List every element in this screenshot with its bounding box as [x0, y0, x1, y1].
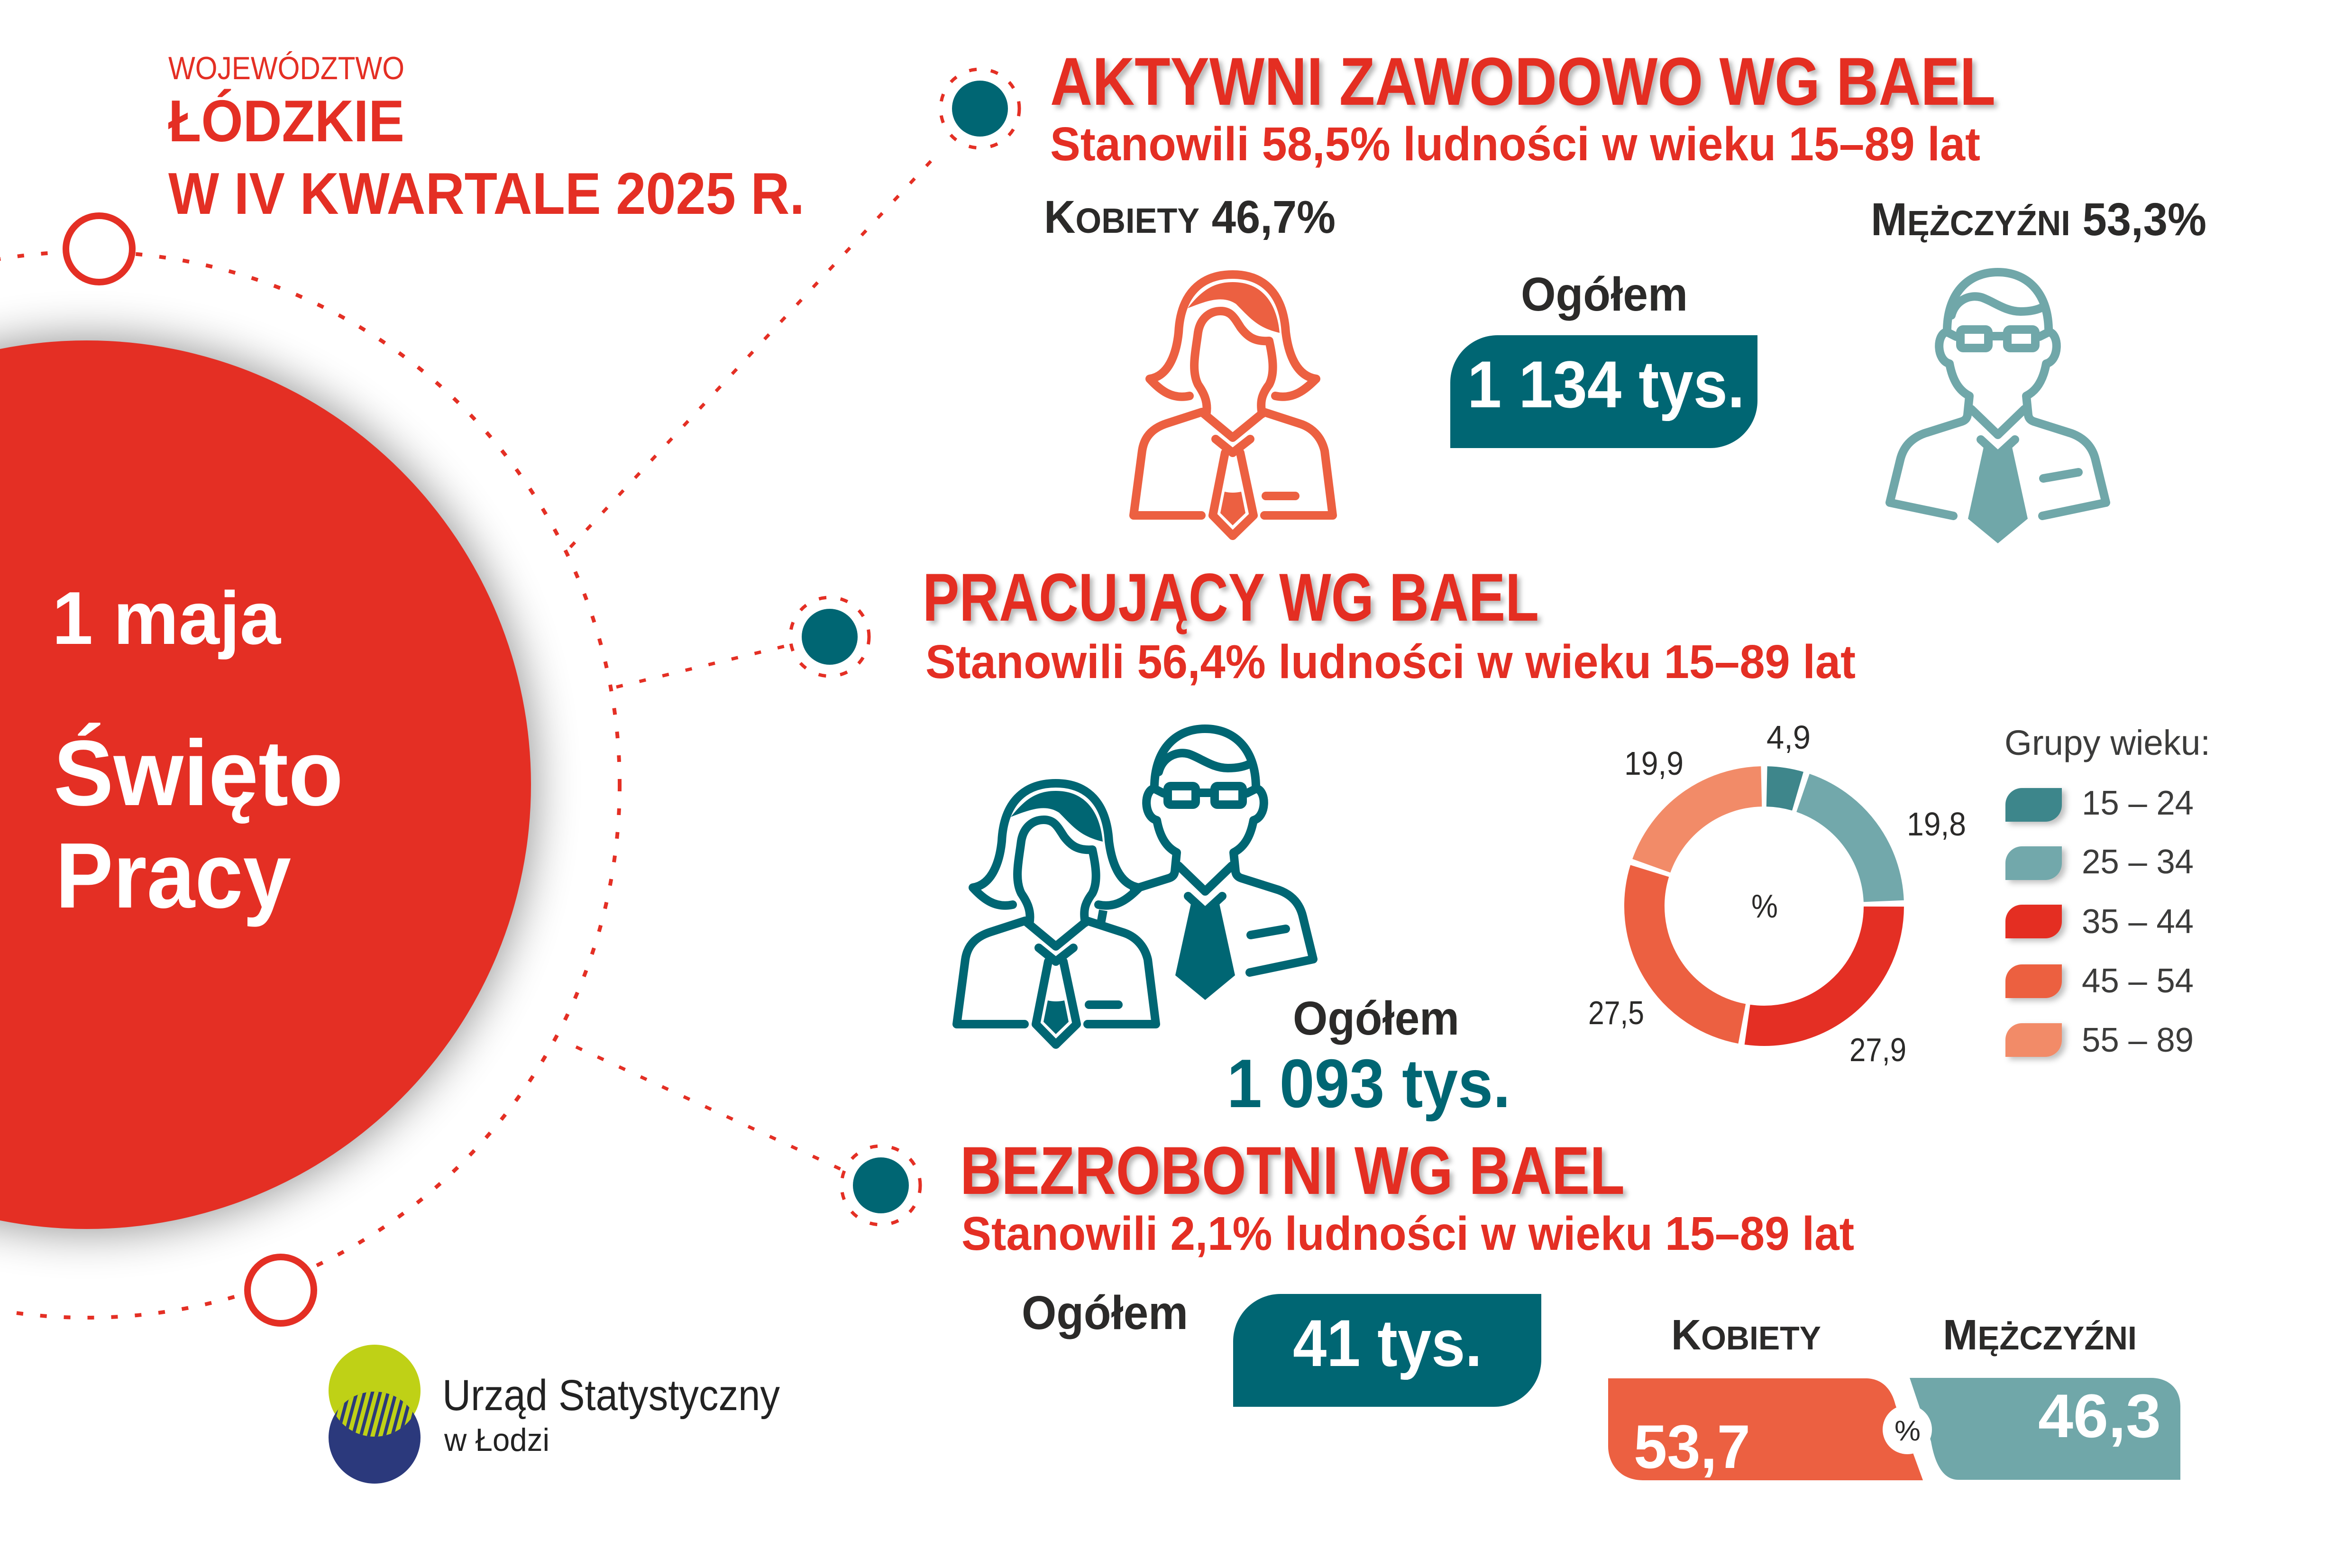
connector 3 [576, 1047, 843, 1170]
subheading: aktywni: Stanowili 58,5% ludności w wieku 15–89 lat [1050, 118, 1980, 171]
total label: aktywni: Ogółem [1521, 268, 1688, 321]
legend item 45-54: 45 – 54 [2082, 962, 2194, 1000]
big red circle with shadow [0, 338, 534, 1232]
woman figure [957, 783, 1156, 1045]
donut labels: 19,8 [1907, 806, 1966, 843]
icon: woman [1134, 275, 1333, 536]
segment 15-24 [1767, 787, 1798, 791]
connector 2 [616, 645, 790, 687]
total label: bezrobotni: Ogółem [1022, 1286, 1188, 1339]
total box: bezrobotni: 41 tys. [1293, 1306, 1482, 1380]
region name: ŁÓDZKIE [168, 89, 404, 154]
value women: 53,7 [1634, 1412, 1750, 1481]
percent badge [1883, 1405, 1932, 1454]
legend item 35-44: 35 – 44 [2082, 903, 2194, 941]
donut labels: 19,9 [1624, 745, 1684, 782]
label: mężczyźni: MĘŻCZYŹNI 53,3% [1871, 193, 2206, 245]
legend item 25-34: 25 – 34 [2082, 843, 2194, 881]
legend item 15-24: 15 – 24 [2082, 784, 2194, 822]
percent badge: % [1894, 1415, 1921, 1447]
donut labels: % [1751, 888, 1778, 925]
legend item 55-89 [2005, 1021, 2194, 1059]
label: kobiety bezrobotni: KOBIETY [1671, 1311, 1821, 1359]
man figure [1100, 729, 1313, 1000]
legend item 45-54 [2005, 962, 2194, 1000]
segment 25-34 [1803, 793, 1884, 901]
gender bar: bezrobotni [1608, 1378, 2180, 1481]
donut labels [1588, 719, 1966, 1068]
bar women [1608, 1378, 1923, 1480]
label: mężczyźni bezrobotni: MĘŻCZYŹNI [1943, 1311, 2137, 1359]
icon: man [1890, 272, 2106, 543]
value men: 46,3 [2038, 1381, 2161, 1450]
legend title: Grupy wieku: [2004, 723, 2210, 762]
legend item 55-89: 55 – 89 [2082, 1021, 2194, 1059]
legend [2004, 723, 2210, 1059]
legend item 25-34 [2005, 843, 2194, 881]
logo text line 1: Urząd Statystyczny [442, 1371, 780, 1420]
node 1 [941, 69, 1019, 148]
logo: Urząd Statystyczny w Łodzi [310, 1345, 780, 1484]
total box: bezrobotni [1233, 1294, 1541, 1407]
total value: pracujący: 1 093 tys. [1227, 1045, 1510, 1122]
section heading: aktywni zawodowo: AKTYWNI ZAWODOWO WG BAEL [1050, 44, 1995, 119]
section heading: bezrobotni: BEZROBOTNI WG BAEL [960, 1133, 1625, 1209]
dotted orbit around circle [0, 252, 620, 1318]
donut chart [1644, 787, 1884, 1026]
icon: man and woman [957, 729, 1313, 1045]
logo mark [329, 1345, 421, 1484]
subheading: bezrobotni: Stanowili 2,1% ludności w wieku 15–89 lat [961, 1207, 1854, 1260]
legend item 35-44 [2005, 903, 2194, 941]
donut labels: 27,9 [1849, 1031, 1906, 1068]
segment 45-54 [1644, 871, 1742, 1024]
node 2 [790, 597, 869, 676]
voivodeship label: WOJEWÓDZTWO [168, 50, 404, 86]
date: 1 maja [52, 577, 281, 660]
subheading: pracujący: Stanowili 56,4% ludności w wieku 15–89 lat [925, 635, 1856, 688]
segment 55-89 [1651, 787, 1761, 866]
holiday name line 2: Pracy [55, 824, 291, 927]
donut labels: 4,9 [1766, 719, 1811, 756]
total box: aktywni: 1 134 tys. [1467, 347, 1745, 422]
node 3 [842, 1146, 920, 1225]
orbit ring bottom [247, 1257, 314, 1323]
orbit ring top [66, 216, 132, 282]
segment 35-44 [1748, 907, 1884, 1026]
label: kobiety: KOBIETY 46,7% [1044, 191, 1336, 243]
holiday name line 1: Święto [54, 721, 343, 825]
connector 1 [570, 152, 940, 547]
logo text line 2: w Łodzi [444, 1422, 549, 1458]
donut labels: 27,5 [1588, 994, 1644, 1031]
total box: aktywni [1450, 335, 1757, 448]
region heading [168, 50, 805, 227]
period: W IV KWARTALE 2025 R. [168, 161, 805, 227]
total label: pracujący: Ogółem [1293, 992, 1459, 1045]
section heading: pracujący: PRACUJĄCY WG BAEL [923, 560, 1539, 635]
legend item 15-24 [2005, 784, 2194, 822]
circle text [52, 577, 343, 927]
bar men [1910, 1378, 2180, 1480]
